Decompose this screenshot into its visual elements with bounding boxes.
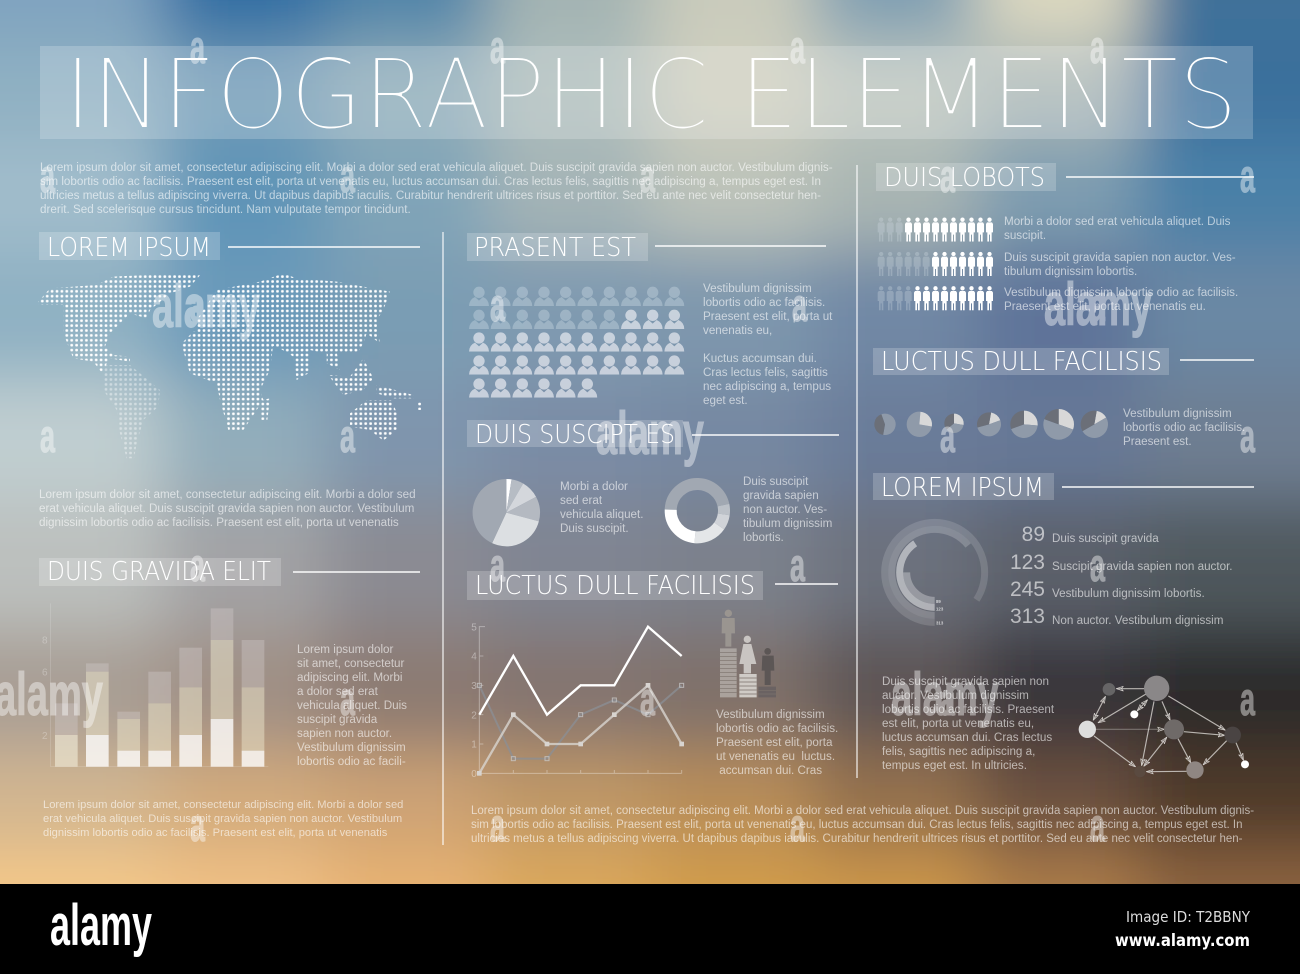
pie text	[560, 480, 643, 535]
line chart text: Vestibulum dignissim	[716, 708, 825, 721]
watermarks: a	[490, 539, 505, 591]
solid figures	[905, 218, 993, 310]
watermarks: a	[792, 279, 807, 331]
intro text: Lorem ipsum dolor sit amet, consectetur adipiscing elit. Morbi a dolor sed erat vehicula aliquet. Duis suscipit gravida sapien non auctor. Vestibulum dignis-	[40, 161, 833, 174]
lower left text	[43, 799, 403, 839]
donut text: Duis suscipit	[743, 475, 808, 488]
donut text	[743, 475, 832, 544]
watermarks: alamy	[1044, 271, 1152, 338]
stat 89	[1022, 523, 1159, 546]
title banner	[40, 46, 1253, 139]
watermarks: a	[190, 279, 205, 331]
watermarks: a	[40, 150, 55, 202]
network text: est elit, porta ut venenatis eu,	[882, 717, 1034, 730]
line chart	[471, 610, 776, 780]
network text: felis, sagittis nec adipiscing a,	[882, 745, 1035, 758]
intro text: sim lobortis odio ac facilisis. Praesent est elit, porta ut venenatis eu, luctus accumsan dui. Cras lectus felis, sagittis nec adipiscing a, tempus eget est. In	[40, 175, 821, 188]
bars	[55, 608, 264, 767]
pie text: Morbi a dolor	[560, 480, 628, 493]
watermarks: a	[790, 21, 805, 73]
figure row text 3	[1004, 286, 1238, 313]
heading box: lorem ipsum right	[873, 473, 1054, 500]
watermarks: a	[790, 799, 805, 851]
people text: Praesent est elit, porta ut	[703, 310, 832, 323]
stat 313: 313	[1010, 605, 1045, 628]
footer logo: alamy	[50, 893, 152, 958]
lower left text: Lorem ipsum dolor sit amet, consectetur adipiscing elit. Morbi a dolor sed	[43, 799, 403, 811]
watermarks: a	[1090, 279, 1105, 331]
pie text: vehicula aliquet.	[560, 508, 643, 521]
bar chart text: Vestibulum dignissim	[297, 741, 406, 754]
people text: Cras lectus felis, sagittis	[703, 366, 828, 379]
stacked bar chart	[42, 604, 268, 767]
small pie 6	[1049, 415, 1068, 434]
people figure rows and small pies	[874, 218, 1108, 440]
lower centre text: Lorem ipsum dolor sit amet, consectetur adipiscing elit. Morbi a dolor sed erat vehicula aliquet. Duis suscipit gravida sapien non auctor. Vestibulum dignis-	[471, 805, 1254, 817]
website: www.alamy.com	[1115, 931, 1250, 951]
watermarks: a	[1240, 150, 1255, 202]
network edges	[1093, 689, 1243, 772]
radial labels: 123	[936, 606, 944, 611]
bar chart text: sit amet, consectetur	[297, 657, 404, 670]
stat 245: Vestibulum dignissim lobortis.	[1052, 587, 1205, 600]
figure row text: Morbi a dolor sed erat vehicula aliquet. Duis	[1004, 215, 1230, 228]
heading box: prasent est	[467, 233, 648, 261]
heading box: duis lobots	[876, 163, 1056, 191]
donut text: non auctor. Ves-	[743, 503, 827, 516]
heading: prasent est: PRASENT EST	[474, 233, 636, 263]
world map caption: dignissim lobortis odio ac facilisis. Praesent est elit, porta ut venenatis	[39, 516, 399, 529]
lower centre text	[471, 805, 1254, 845]
axis labels: 1	[471, 740, 477, 751]
watermarks: a	[790, 539, 805, 591]
figure row text	[1004, 215, 1230, 242]
world map caption: erat vehicula aliquet. Duis suscipit gravida sapien non auctor. Vestibulum	[39, 502, 414, 515]
podium pictogram	[720, 610, 776, 697]
stacked bar chart: 6	[42, 667, 48, 678]
watermarks: a	[490, 21, 505, 73]
radial labels	[936, 599, 944, 626]
small pies text: Vestibulum dignissim	[1123, 407, 1232, 420]
heading box: duis suscipt es	[467, 420, 683, 447]
faded people	[469, 287, 684, 329]
solid people	[469, 310, 684, 398]
intro text: drerit. Sed scelerisque cursus tincidunt. Nam vulputate tempor tincidunt.	[40, 203, 411, 216]
watermarks: a	[340, 673, 355, 725]
people text: eget est.	[703, 394, 748, 407]
bar chart text: adipiscing elit. Morbi	[297, 671, 402, 684]
stat 245	[1010, 578, 1205, 601]
stat 123: 123	[1010, 551, 1045, 574]
figure row text 2: Duis suscipit gravida sapien non auctor. Ves-	[1004, 251, 1236, 264]
line chart text: lobortis odio ac facilisis.	[716, 722, 838, 735]
watermarks: a	[190, 539, 205, 591]
watermarks: a	[1090, 539, 1105, 591]
radial chart and network	[881, 519, 1249, 779]
network nodes	[1079, 676, 1249, 779]
bar chart text: sapien non auctor.	[297, 727, 392, 740]
figure row text 2	[1004, 251, 1236, 278]
heading box: luctus dull facilisis centre	[467, 571, 763, 600]
heading: luctus dull facilisis right: LUCTUS DULL FACILISIS	[881, 347, 1162, 377]
people text: venenatis eu,	[703, 324, 772, 337]
pie text: Duis suscipit.	[560, 522, 629, 535]
watermarks: a	[340, 150, 355, 202]
stat 245: 245	[1010, 578, 1045, 601]
network text: auctor. Vestibulum dignissim	[882, 689, 1029, 702]
chart axes	[479, 627, 682, 773]
donut text: lobortis.	[743, 531, 784, 544]
stacked bar chart: 2	[42, 731, 48, 742]
figure row text: suscipit.	[1004, 229, 1046, 242]
figure row text 3: Vestibulum dignissim lobortis odio ac facilisis.	[1004, 286, 1238, 299]
lower left text: erat vehicula aliquet. Duis suscipit gravida sapien non auctor. Vestibulum	[43, 813, 402, 825]
axis labels: 3	[471, 681, 477, 692]
watermarks: a	[940, 673, 955, 725]
line chart text	[716, 708, 838, 777]
grey series	[479, 685, 682, 759]
axis labels: 0	[471, 769, 477, 780]
watermarks: a	[490, 799, 505, 851]
stat 123	[1010, 551, 1233, 574]
stat 123: Suscipit gravida sapien non auctor.	[1052, 560, 1233, 573]
chart axis	[51, 603, 268, 767]
heading box: duis gravida elit	[39, 558, 281, 586]
stat 313: Non auctor. Vestibulum dignissim	[1052, 614, 1223, 627]
faded figures	[878, 218, 930, 310]
people text	[703, 282, 832, 407]
watermarks: a	[490, 279, 505, 331]
watermarks: alamy	[891, 661, 999, 728]
bar chart text: a dolor sed erat	[297, 685, 378, 698]
stat 89: 89	[1022, 523, 1045, 546]
watermarks: a	[1240, 673, 1255, 725]
watermarks: a	[640, 673, 655, 725]
lower left text: dignissim lobortis odio ac facilisis. Praesent est elit, porta ut venenatis	[43, 827, 387, 839]
small pie 1	[878, 417, 892, 431]
people text: nec adipiscing a, tempus	[703, 380, 831, 393]
people text: lobortis odio ac facilisis.	[703, 296, 825, 309]
light series	[479, 685, 682, 773]
heading: duis gravida elit: DUIS GRAVIDA ELIT	[47, 557, 271, 587]
radial rings	[885, 522, 985, 622]
heading: lorem ipsum right: LOREM IPSUM	[881, 473, 1044, 503]
world map caption: Lorem ipsum dolor sit amet, consectetur adipiscing elit. Morbi a dolor sed	[39, 488, 416, 501]
watermarks: a	[190, 21, 205, 73]
line chart text: ut venenatis eu luctus.	[716, 750, 835, 763]
white series	[479, 627, 682, 715]
bar chart text: Lorem ipsum dolor	[297, 643, 393, 656]
main title: INFOGRAPHIC ELEMENTS	[64, 38, 1238, 151]
bar chart text: suscipit gravida	[297, 713, 377, 726]
watermarks: a	[640, 150, 655, 202]
axis labels: 5	[471, 622, 477, 633]
stat 89: Duis suscipit gravida	[1052, 532, 1159, 545]
people text: Vestibulum dignissim	[703, 282, 812, 295]
heading: luctus dull facilisis: LUCTUS DULL FACILISIS	[475, 571, 755, 601]
lower centre text: sim lobortis odio ac facilisis. Praesent est elit, porta ut venenatis eu, luctus accumsan dui. Cras lectus felis, sagittis nec adipiscing a, tempus eget est. In	[471, 819, 1243, 831]
watermarks: alamy	[152, 273, 260, 340]
network text: Duis suscipit gravida sapien non	[882, 675, 1049, 688]
intro text: ultricies metus a tellus adipiscing viverra. Ut dapibus dapibus iaculis. Curabitur hendrerit ultrices risus et porttitor. Sed eu ante nec velit consectetur hen-	[40, 189, 821, 202]
line chart text: Praesent est elit, porta	[716, 736, 832, 749]
axis labels: 4	[471, 652, 477, 663]
watermarks: a	[940, 410, 955, 462]
stacked bar chart: 8	[42, 635, 48, 646]
footer bar	[50, 893, 1251, 958]
watermarks: a	[40, 410, 55, 462]
radial labels: 313	[936, 621, 944, 626]
heading box: luctus dull facilisis right	[873, 348, 1169, 375]
bar chart text	[297, 643, 407, 768]
watermarks: a	[340, 410, 355, 462]
heading: duis lobots: DUIS LOBOTS	[884, 163, 1045, 193]
people text: Kuctus accumsan dui.	[703, 352, 817, 365]
bar chart text: vehicula aliquet. Duis	[297, 699, 407, 712]
small pie 4	[981, 417, 997, 432]
pie chart	[483, 490, 529, 536]
bar chart text: lobortis odio ac facili-	[297, 755, 406, 768]
stat 313	[1010, 605, 1223, 628]
small pie 3	[947, 417, 961, 430]
radial labels: 89	[936, 599, 941, 604]
heading: duis suscipt es: DUIS SUSCIPT ES	[475, 420, 675, 450]
heading box: lorem ipsum	[39, 232, 220, 260]
people pictogram grid	[469, 286, 730, 546]
small pie 5	[1015, 416, 1033, 433]
small pie 2	[912, 417, 927, 432]
watermarks: a	[190, 799, 205, 851]
heading: lorem ipsum: LOREM IPSUM	[47, 233, 211, 263]
donut text: tibulum dignissim	[743, 517, 832, 530]
small pies text: lobortis odio ac facilisis.	[1123, 421, 1245, 434]
lower centre text: ultricies metus a tellus adipiscing viverra. Ut dapibus dapibus iaculis. Curabitur hendrerit ultrices risus et porttitor. Sed eu ante nec velit consectetur hen-	[471, 833, 1243, 845]
watermarks: alamy	[596, 400, 704, 467]
pie text: sed erat	[560, 494, 602, 507]
watermarks: a	[1090, 21, 1105, 73]
line chart text: accumsan dui. Cras	[719, 764, 822, 777]
watermarks: a	[940, 150, 955, 202]
network text: luctus accumsan dui. Cras lectus	[882, 731, 1052, 744]
figure row text 3: Praesent est elit, porta ut venenatis eu.	[1004, 300, 1206, 313]
world map caption	[39, 488, 416, 529]
figure row text 2: tibulum dignissim lobortis.	[1004, 265, 1137, 278]
small pie 7	[1085, 415, 1104, 434]
world map	[38, 275, 421, 458]
axis labels	[471, 622, 477, 780]
watermarks: a	[1240, 410, 1255, 462]
network text: tempus eget est. In ultricies.	[882, 759, 1027, 772]
donut text: gravida sapien	[743, 489, 819, 502]
network text: lobortis odio ac facilisis. Praesent	[882, 703, 1054, 716]
watermarks: alamy	[0, 661, 103, 728]
small pies text: Praesent est.	[1123, 435, 1192, 448]
watermarks: a	[1090, 799, 1105, 851]
network text	[882, 675, 1054, 772]
image id: Image ID: T2BBNY	[1126, 908, 1251, 926]
axis labels: 2	[471, 710, 477, 721]
donut chart	[660, 474, 734, 548]
small pies text	[1123, 407, 1245, 448]
intro text	[40, 161, 833, 216]
